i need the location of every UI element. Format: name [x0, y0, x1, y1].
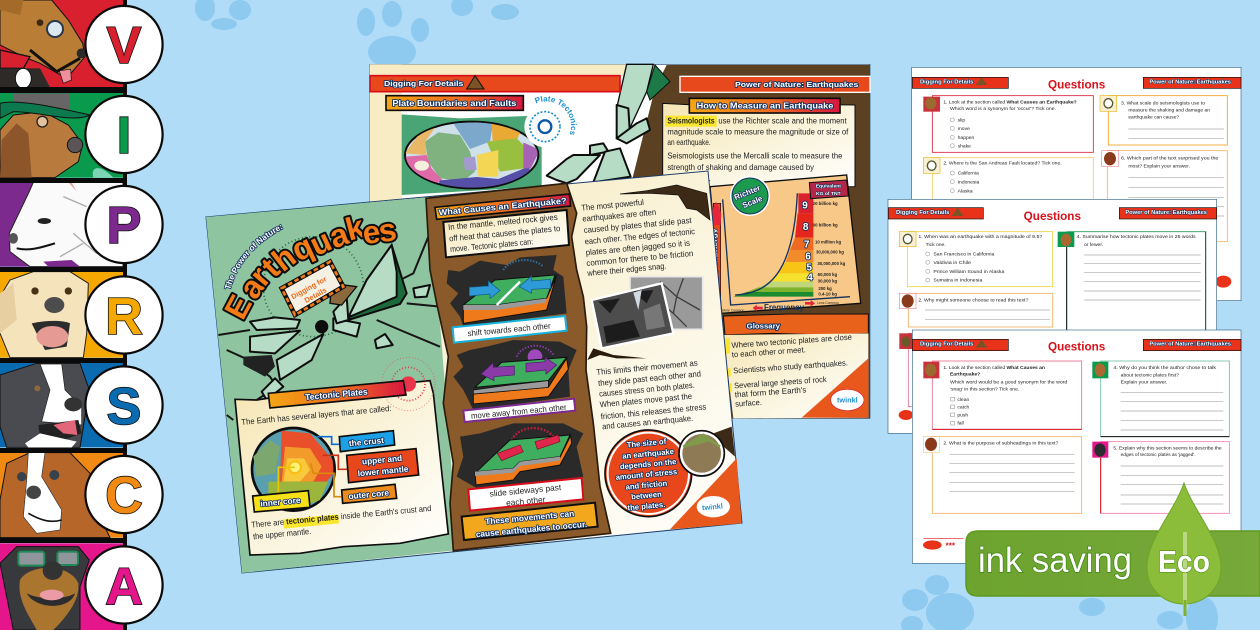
- question 2: Alaska: [958, 188, 973, 194]
- richter scale chart and glossary: [710, 175, 868, 418]
- dog portrait bands: [0, 0, 123, 630]
- label: outer core: outer core: [348, 487, 390, 501]
- glossary strip: Glossary: [747, 322, 781, 331]
- question 4: [1058, 232, 1206, 393]
- question 1: push: [957, 412, 968, 418]
- sheet header: Digging For Details: [920, 79, 973, 85]
- sheet paper: [912, 67, 1241, 301]
- question 1: clean: [957, 397, 969, 403]
- callout circle: size of an earthquake: The size of: [626, 437, 667, 450]
- badge background: [966, 531, 1260, 596]
- tectonic plates caption: [251, 503, 432, 541]
- question 4: [1092, 361, 1229, 437]
- frequency axis label: Less Common: [817, 301, 839, 305]
- energy labels: 0.4-10 kg: [818, 291, 837, 296]
- badge text: ink saving: [978, 541, 1132, 580]
- cream text block one: [581, 197, 695, 278]
- question 3: [1100, 96, 1227, 145]
- question 1: [923, 96, 1093, 152]
- question 2: [923, 158, 1093, 201]
- question 1: 1. Look at the section called What Causes an: [943, 365, 1045, 371]
- band separators: [0, 0, 127, 630]
- ground cracks: [218, 237, 440, 420]
- sheet header: [912, 339, 1241, 353]
- callout: these movements: These movements can: [485, 508, 575, 526]
- callout circle: size of an earthquake: amount of stress: [615, 467, 678, 482]
- question 1: [899, 232, 1053, 287]
- top crack: [620, 185, 710, 220]
- cover artwork and tectonic plates: [218, 224, 450, 556]
- energy labels: 200 kg: [818, 286, 832, 291]
- cream text block two: When plates move past the: [599, 391, 693, 409]
- question 3 partial: [899, 333, 1053, 407]
- dog: airedale: [0, 0, 87, 88]
- question sheet three: [912, 330, 1241, 563]
- question sheet one: [912, 67, 1241, 301]
- title: The Power of Nature: The Power of Nature:: [224, 224, 284, 290]
- dog: rottweiler with glasses: [0, 547, 89, 630]
- glossary panel: Several large sheets of rock: [734, 375, 827, 390]
- digging for details sign: [282, 262, 357, 315]
- label: the crust: the crust: [348, 435, 385, 448]
- panel: back page spread: [369, 64, 871, 419]
- torn paper: measuring text: [663, 103, 855, 188]
- question 1: move: [958, 126, 970, 132]
- photo: cracked ground: [630, 277, 703, 329]
- cream text block one: common for there to be friction: [586, 248, 694, 268]
- magnitude numbers: 9: [802, 200, 808, 211]
- question 1: Earthquake?: [950, 372, 980, 378]
- dog: golden retriever: [0, 272, 88, 358]
- curve and axes: [723, 193, 850, 305]
- Richter Scale badge: Richter: [733, 183, 762, 202]
- cream text block two: they slide past each other and: [598, 368, 702, 388]
- question 3: 3. What scale do seismologists use to: [1121, 100, 1205, 106]
- torn paper: measuring text: Seismologists: [667, 115, 715, 125]
- label: move away from each other: move away from each other: [470, 402, 567, 421]
- magnitude numbers: 8: [803, 222, 809, 233]
- callout: these movements: [462, 503, 598, 540]
- cream text block two: friction, this releases the stress: [600, 401, 707, 421]
- torn paper: measuring text: an earthquake.: [667, 173, 711, 183]
- callout: these movements: cause earthquakes to occur.: [475, 519, 587, 539]
- question 3: measure the shaking and damage an: [1128, 107, 1210, 113]
- question 2: [899, 293, 1053, 327]
- subheading: how to measure: How to Measure an Earthquake: [697, 102, 834, 111]
- leaf: [1147, 483, 1221, 616]
- dog: border collie: [0, 363, 89, 447]
- sheet header: [912, 77, 1241, 91]
- corner with twinkl logo: [802, 358, 868, 418]
- causes column and cream text: [426, 183, 742, 551]
- sheet header: Questions: [1048, 77, 1105, 91]
- question 2: [923, 437, 1082, 513]
- crack shards: [547, 64, 670, 183]
- letter V: V: [107, 17, 142, 75]
- callout circle: size of an earthquake: an earthquake: [622, 447, 674, 461]
- energy labels: 20 billion kg: [813, 201, 838, 206]
- sheet header: Power of Nature: Earthquakes: [1125, 210, 1207, 216]
- question 5: edges of tectonic plates as 'jagged'.: [1121, 452, 1196, 458]
- label: shift towards each other: [453, 316, 567, 343]
- cream text block one: The most powerful: [581, 197, 644, 213]
- equivalent label: KG of TNT: [816, 191, 841, 197]
- label: slide sideways past each other: each other: [506, 494, 546, 508]
- amplitude axis label: [711, 202, 721, 305]
- question 1: 'snag' in this section? Tick one.: [950, 387, 1019, 393]
- question 1: shake: [958, 143, 971, 149]
- question 1: happen: [958, 135, 975, 141]
- earth cross-section globe: [252, 428, 335, 511]
- green cover panel: [206, 197, 458, 573]
- torn paper: measuring text: Seismologists use the Mercalli scale to measure the: [667, 150, 843, 160]
- panel: front page spread: [205, 170, 742, 574]
- cracked ground shards: [250, 245, 430, 400]
- cream text block one: earthquakes are often: [582, 207, 657, 224]
- letter C: C: [105, 467, 143, 525]
- leaf: Eco: [1158, 544, 1210, 579]
- magnitude colour bands: [733, 193, 813, 297]
- tectonic plates caption: the upper mantle.: [253, 526, 312, 541]
- energy labels: 30,000,000 kg: [817, 261, 846, 266]
- glossary panel: Where two tectonic plates are close: [731, 333, 853, 350]
- torn paper: measuring text: an earthquake.: [667, 137, 711, 147]
- dog: white samoyed: [9, 182, 123, 267]
- sheet footer: [923, 538, 963, 550]
- question 2: California: [958, 171, 979, 177]
- question 1: Tick one.: [926, 242, 946, 248]
- glossary panel: that form the Earth's: [735, 385, 807, 399]
- question 4: 4. Why do you think the author chose to talk: [1113, 365, 1217, 371]
- label: upper and lower mantle: upper and: [362, 453, 403, 467]
- frequency axis label: Frequency: [764, 303, 805, 312]
- subheading: plate boundaries: Plate Boundaries and Faults: [392, 99, 517, 108]
- magnitude numbers: 5: [807, 263, 813, 274]
- cream text block two: This limits their movement as: [596, 358, 698, 377]
- brown rock column: [426, 183, 611, 551]
- glossary strip: [723, 314, 868, 335]
- frequency axis label: [722, 300, 839, 312]
- torn paper: measuring text: use the Richter scale and the moment: [718, 115, 847, 125]
- question sheet two: [888, 199, 1217, 433]
- question 2: Indonesia: [958, 179, 980, 185]
- sidebar: VIPERS reading dogs: [0, 0, 162, 630]
- question 1: Valdivia in Chile: [933, 260, 971, 266]
- cream text block one: plates are often jagged so it is: [585, 238, 690, 257]
- mid crack: [587, 348, 647, 360]
- question 4: or fewer.: [1084, 242, 1103, 248]
- letter R: R: [105, 288, 143, 346]
- callout circle: size of an earthquake: depends on the: [620, 457, 677, 471]
- question 2: 2. Where is the San Andreas Fault located? Tick one.: [943, 160, 1062, 166]
- intro box: off heat that causes the plates to: [449, 223, 561, 243]
- connector lines: [278, 437, 348, 497]
- intro text: The Earth has several layers that are called:: [241, 403, 392, 427]
- world map of tectonic plates: [402, 114, 542, 195]
- question 4: 4. Summarise how tectonic plates move in 25 words: [1077, 234, 1196, 240]
- question 5: 5. Explain why this section seems to describe the: [1113, 445, 1222, 451]
- question 6: [1102, 151, 1227, 242]
- subheading: how to measure: [689, 98, 840, 113]
- letter R: [86, 278, 162, 352]
- photo: rockfall: [592, 283, 673, 348]
- question 1: 1. Look at the section called What Causes an Earthquake?: [943, 99, 1077, 105]
- diagram: move away from each other: [453, 340, 577, 410]
- question 1: [923, 361, 1082, 429]
- letter V: [86, 7, 162, 82]
- question 6: 6. Which part of the text surprised you the: [1121, 155, 1219, 161]
- question 4: about tectonic plates first?: [1121, 373, 1179, 379]
- digging for details sign: Details: [303, 285, 328, 305]
- question 1: slip: [958, 118, 965, 124]
- question 1: 1. When was an earthquake with a magnitude of 9.5?: [918, 234, 1043, 240]
- magnitude numbers: 6: [805, 251, 811, 262]
- label: upper and lower mantle: [347, 449, 419, 483]
- question 1: Which word would be a good synonym for the word: [950, 379, 1068, 385]
- magnitude numbers: 4: [807, 272, 813, 283]
- sheet header: Digging For Details: [896, 210, 949, 216]
- callout circle: size of an earthquake: the plates.: [627, 500, 666, 512]
- page sheet: [206, 171, 742, 573]
- label: upper and lower mantle: lower mantle: [357, 464, 409, 478]
- callout circle: size of an earthquake: between: [631, 490, 662, 501]
- energy labels: 60,000 kg: [818, 272, 838, 277]
- header bar left: [370, 76, 620, 92]
- heading: what causes an earthquake: What Causes an Earthquake?: [438, 195, 567, 217]
- sheet header: Digging For Details: [920, 342, 973, 348]
- letter P: [86, 187, 162, 262]
- Richter Scale badge: Scale: [741, 194, 764, 210]
- question 1: Sumatra in Indonesia: [933, 278, 983, 284]
- callout circle: size of an earthquake: and friction: [625, 479, 668, 492]
- letter C: [86, 457, 162, 532]
- digging for details sign: Digging for: [290, 274, 328, 301]
- letter A: A: [105, 558, 143, 616]
- energy labels: 60 billion kg: [813, 223, 838, 228]
- plate tectonics roundel: [524, 96, 577, 147]
- callout circle: size of an earthquake: [605, 430, 692, 517]
- corner triangle with logo: [670, 427, 742, 529]
- sheet paper: [912, 330, 1241, 563]
- corner with twinkl logo: twinkl: [837, 395, 858, 404]
- header bar right: Power of Nature: Earthquakes: [735, 80, 858, 89]
- letter S: S: [107, 378, 141, 436]
- sheet logo: [899, 410, 913, 420]
- label: slide sideways past each other: slide sideways past: [489, 482, 562, 499]
- frequency axis label: More Common: [722, 308, 744, 312]
- question 1: Which word is a synonym for 'occur'? Tick one.: [950, 106, 1056, 112]
- cream text block one: caused by plates that slide past: [583, 215, 693, 235]
- tectonic plates caption: There are tectonic plates inside the Earth's crust and: [251, 503, 432, 530]
- dog: bloodhound with hat: [0, 93, 113, 178]
- diagram: shift towards each other: [447, 255, 567, 327]
- letter P: P: [107, 197, 141, 255]
- question 5: [1092, 442, 1229, 513]
- sheet paper: [888, 199, 1217, 433]
- letter I: I: [117, 107, 131, 165]
- cream text block two: causes stress on both plates.: [599, 380, 695, 399]
- question 2: 2. What is the purpose of subheadings in this text?: [943, 440, 1059, 446]
- question 2: 2. Why might someone choose to read this text?: [918, 297, 1029, 303]
- subheading: plate boundaries: [386, 96, 523, 110]
- glossary panel: [723, 333, 868, 418]
- header bar right: [680, 76, 870, 92]
- energy labels: 30,000,000 kg: [816, 249, 844, 254]
- question 4: Explain your answer.: [1121, 379, 1167, 385]
- torn paper: measuring text: magnitude scale to measure the magnitude or size of: [667, 126, 849, 136]
- title: Earthquakes: Earthquakes: [217, 208, 399, 325]
- seismic rings: [382, 357, 435, 411]
- intro box: [443, 210, 569, 257]
- label: outer core: [342, 484, 397, 503]
- letter A: [86, 548, 162, 622]
- question 1: San Francisco in California: [933, 252, 995, 258]
- photo circle: landslide: [679, 431, 724, 476]
- glossary panel: surface.: [735, 398, 762, 409]
- label: slide sideways past each other: [468, 478, 583, 511]
- energy labels: [813, 201, 846, 296]
- question 1: catch: [957, 404, 969, 410]
- glossary panel: to each other or meet.: [732, 345, 806, 359]
- sheet header: Power of Nature: Earthquakes: [1149, 79, 1231, 85]
- sheet header: Questions: [1048, 339, 1105, 353]
- sheet header: [888, 208, 1217, 223]
- sheet footer: ***: [946, 541, 956, 550]
- label: the crust: [339, 431, 395, 452]
- letter I: [86, 97, 162, 172]
- diagram: slide sideways past each other: [457, 423, 583, 490]
- chart background: [710, 175, 861, 313]
- corner triangle with logo: twinkl: [702, 501, 723, 512]
- dotted circle: [263, 237, 363, 337]
- tectonic plates heading: Tectonic Plates: [305, 386, 368, 402]
- question 1: Prince William Sound in Alaska: [933, 269, 1005, 275]
- energy labels: 10 million kg: [815, 239, 842, 244]
- energy labels: 30,000 kg: [818, 279, 838, 284]
- sheet logo: [1215, 276, 1231, 288]
- magnitude numbers: 7: [804, 239, 810, 250]
- question 6: most? Explain your answer.: [1128, 164, 1190, 170]
- tectonic plates heading: [268, 381, 406, 408]
- torn paper: tectonic plates: [235, 357, 448, 555]
- intro box: move. Tectonic plates can:: [450, 236, 533, 254]
- cream text block one: where their edges snag.: [586, 261, 667, 278]
- magnitude numbers: [802, 200, 813, 283]
- page base: [369, 64, 871, 419]
- cream text block two: and causes an earthquake.: [602, 413, 693, 431]
- sheet header: Power of Nature: Earthquakes: [1149, 342, 1231, 348]
- sheet header: Questions: [1024, 209, 1081, 223]
- dog: cavalier spaniel: [0, 453, 110, 538]
- cream text block one: each other. The edges of tectonic: [584, 226, 695, 246]
- header bar left: Digging For Details: [384, 79, 463, 88]
- letter S: [86, 368, 162, 442]
- plate tectonics roundel: Plate Tectonics: [534, 96, 577, 135]
- letter circles: [86, 7, 162, 622]
- label: inner core: [253, 491, 310, 512]
- glossary panel: Scientists who study earthquakes.: [733, 358, 848, 375]
- label: inner core: inner core: [260, 495, 301, 509]
- intro box: In the mantle, melted rock gives: [448, 212, 558, 232]
- label: shift towards each other: shift towards each other: [467, 320, 551, 338]
- torn paper: measuring text: strength of shaking and damage caused by: [667, 162, 815, 172]
- ink saving eco badge: [966, 483, 1260, 616]
- question 1: fall: [957, 421, 964, 427]
- equivalent label: [809, 180, 848, 199]
- cream text block two: [596, 358, 707, 431]
- amplitude axis label: Amount of Energy: [712, 228, 721, 303]
- equivalent label: Equivalent: [816, 184, 841, 190]
- question 3: earthquake can cause?: [1128, 115, 1179, 121]
- Richter Scale badge: [730, 176, 770, 216]
